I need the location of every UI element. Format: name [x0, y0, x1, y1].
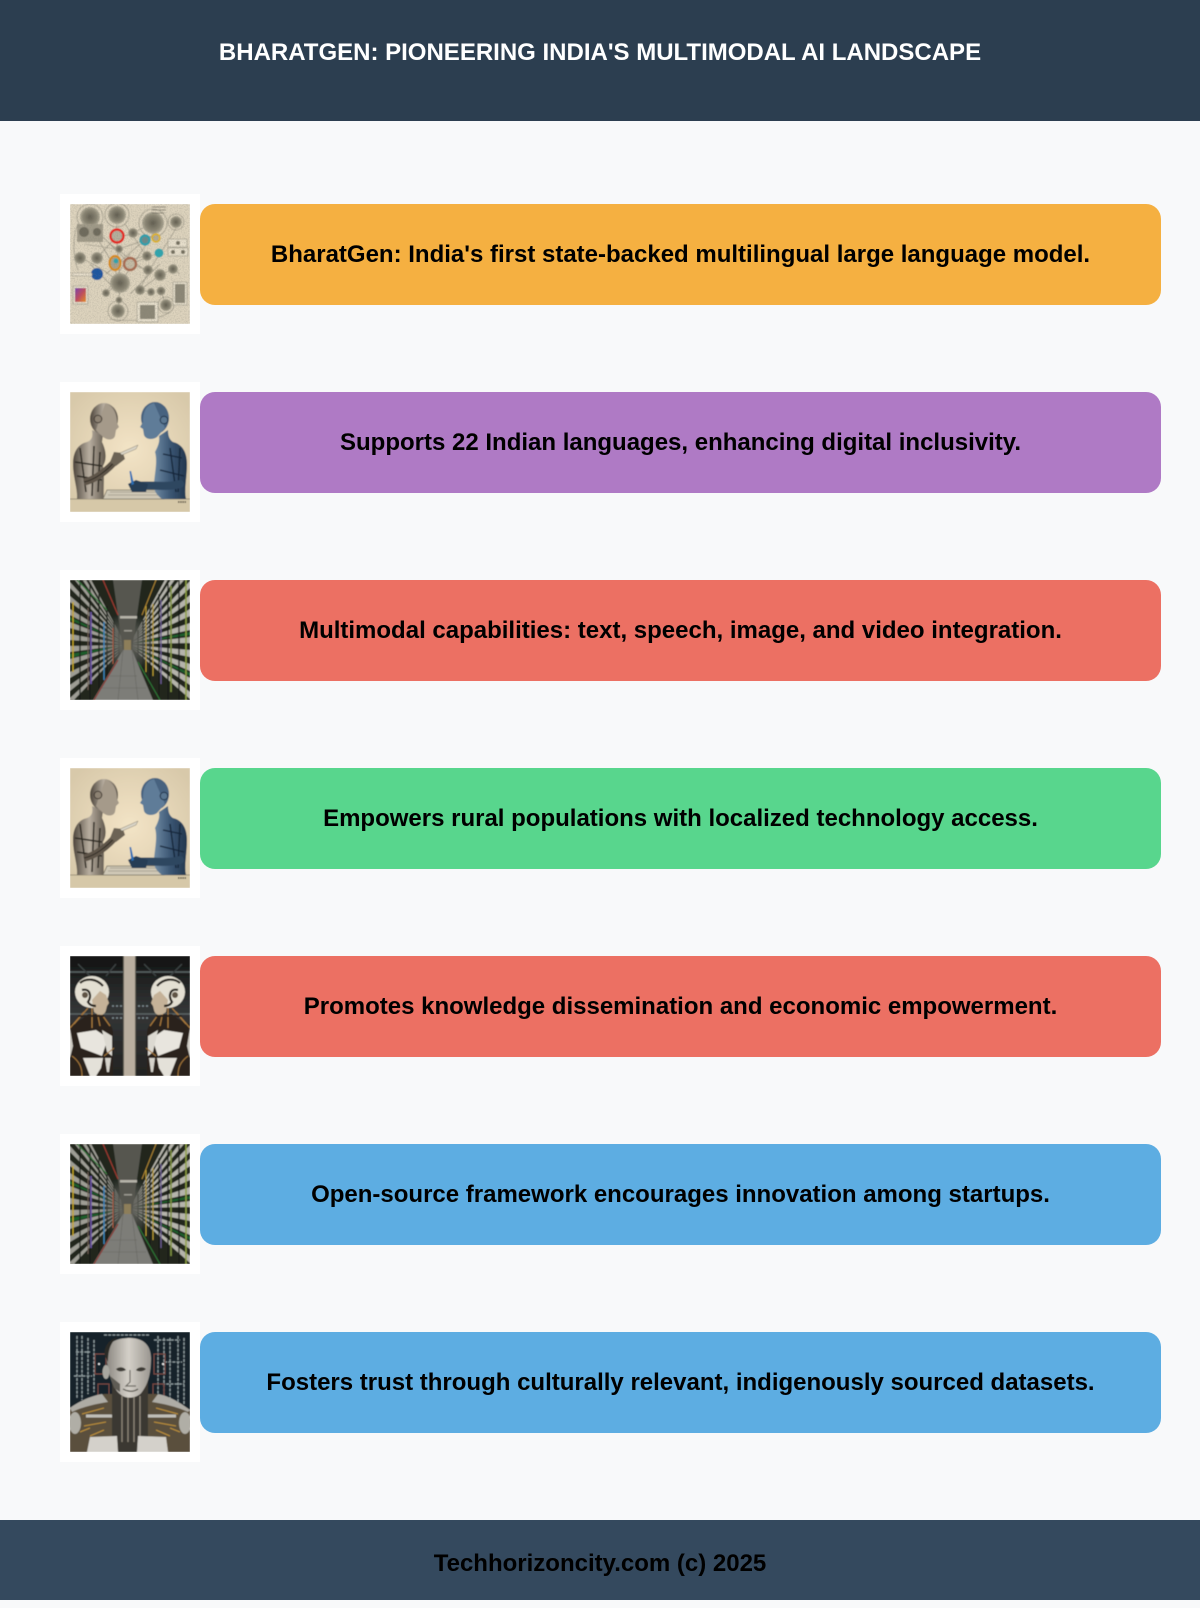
footer: Techhorizoncity.com (c) 2025 [434, 1550, 766, 1577]
header banner [0, 0, 1200, 121]
image: two robots writing [60, 758, 200, 898]
item 3: multimodal capabilities [70, 580, 1161, 700]
text bar: Multimodal capabilities: text, speech, image, and video integration. [299, 617, 1062, 644]
image: mirrored robots [60, 946, 200, 1086]
item 7: trust through datasets [70, 1332, 1161, 1452]
image: server corridor [60, 1134, 200, 1274]
item 5: knowledge dissemination [70, 956, 1161, 1076]
text bar: BharatGen: India's first state-backed multilingual large language model. [271, 241, 1090, 268]
text bar [200, 1332, 1161, 1433]
small boxes [73, 286, 88, 304]
text bar: Promotes knowledge dissemination and economic empowerment. [304, 993, 1057, 1020]
text bar [200, 204, 1161, 305]
item 2: 22 Indian languages [70, 392, 1161, 512]
image: two robots writing [60, 382, 200, 522]
node clusters [74, 206, 182, 318]
text bar [200, 1144, 1161, 1245]
text bar [200, 768, 1161, 869]
text bar: Fosters trust through culturally relevant, indigenously sourced datasets. [266, 1369, 1095, 1396]
item 4: rural populations [70, 768, 1161, 888]
image: network diagram [60, 194, 200, 334]
image: humanoid robot portrait [60, 1322, 200, 1462]
text bar [200, 956, 1161, 1057]
footer [0, 1520, 1200, 1600]
text bar: Empowers rural populations with localized technology access. [323, 805, 1038, 832]
text bar [200, 580, 1161, 681]
item 1: first state-backed LLM [70, 204, 1161, 324]
item 6: open-source framework [70, 1144, 1161, 1264]
text bar [200, 392, 1161, 493]
title: BHARATGEN: PIONEERING INDIA'S MULTIMODAL AI LANDSCAPE [219, 39, 981, 66]
coloured rings [110, 230, 124, 242]
image: server corridor [60, 570, 200, 710]
text bar: Supports 22 Indian languages, enhancing digital inclusivity. [340, 429, 1021, 456]
text bar: Open-source framework encourages innovation among startups. [311, 1181, 1050, 1208]
